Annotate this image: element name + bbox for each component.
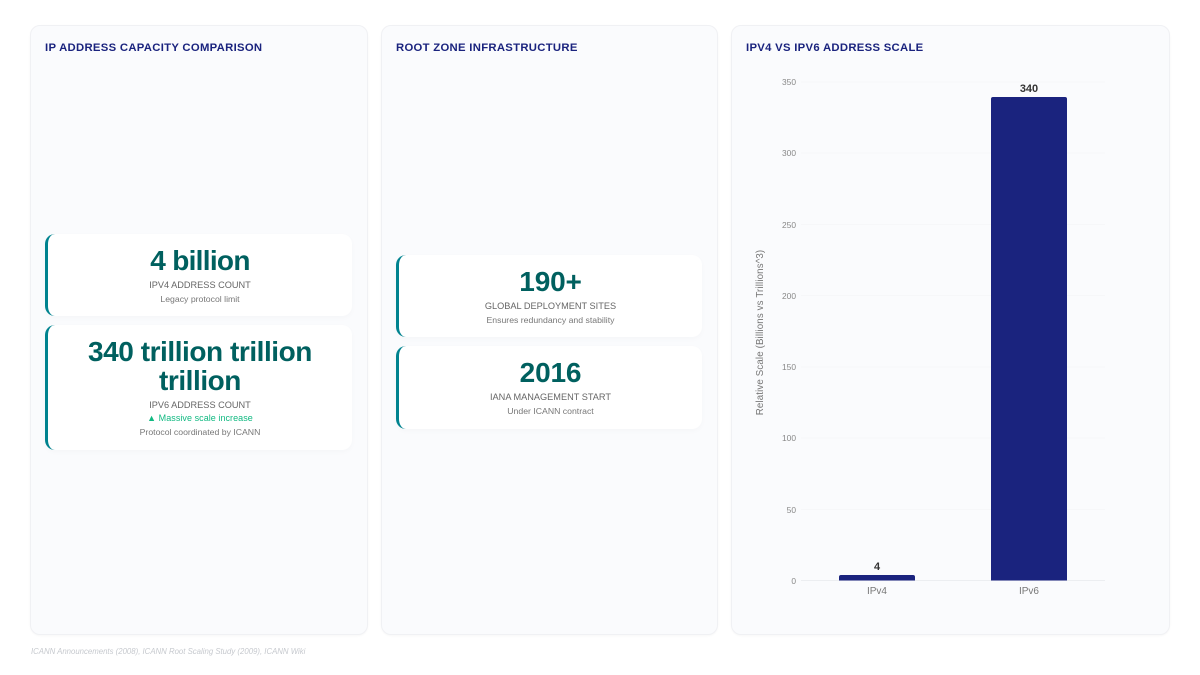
card: IPv4 address count: 4 billion <box>150 245 250 276</box>
y axis tick labels <box>782 77 796 586</box>
heading: root zone infrastructure: ROOT ZONE INFRASTRUCTURE <box>396 42 578 54</box>
card: IPv4 address count: Legacy protocol limit <box>160 294 240 304</box>
bar: IPv4: IPv4 <box>867 586 887 597</box>
bar chart: relative address scale <box>755 77 1105 597</box>
y axis title: Relative Scale (Billions vs Trillions^3) <box>755 250 766 415</box>
panel: IP address capacity comparison <box>30 25 368 635</box>
panel: IPv4 vs IPv6 address scale <box>731 25 1170 635</box>
y axis tick labels: 300 <box>782 148 796 158</box>
card: global deployment sites: GLOBAL DEPLOYMENT SITES <box>485 301 616 311</box>
card: IANA management start <box>396 346 702 429</box>
source note: ICANN Announcements (2008), ICANN Root Scaling Study (2009), ICANN Wiki <box>31 647 305 656</box>
card: global deployment sites <box>396 255 702 337</box>
y axis tick labels: 100 <box>782 433 796 443</box>
card: IPv6 address count: Protocol coordinated by ICANN <box>140 427 260 437</box>
y axis tick labels: 0 <box>791 576 796 586</box>
card: IPv6 address count <box>45 325 352 450</box>
y axis tick labels: 200 <box>782 291 796 301</box>
card: IANA management start: IANA MANAGEMENT START <box>490 392 611 402</box>
card: global deployment sites: Ensures redundancy and stability <box>486 315 614 325</box>
y axis tick labels: 150 <box>782 362 796 372</box>
card: IPv6 address count: trillion <box>159 365 241 396</box>
bar: IPv4: 4 <box>874 561 881 573</box>
heading: IPv4 vs IPv6 address scale: IPV4 VS IPV6 ADDRESS SCALE <box>746 42 924 54</box>
bar: IPv6: 340 <box>1020 83 1038 95</box>
y axis tick labels: 250 <box>782 220 796 230</box>
card: IANA management start: Under ICANN contract <box>507 406 594 416</box>
heading: IP address capacity comparison: IP ADDRESS CAPACITY COMPARISON <box>45 42 262 54</box>
card: IPv6 address count: IPV6 ADDRESS COUNT <box>149 400 251 410</box>
card: IANA management start: 2016 <box>520 357 581 388</box>
card: IPv6 address count: ▲ Massive scale increase <box>147 413 253 423</box>
y axis tick labels: 350 <box>782 77 796 87</box>
card: IPv4 address count <box>45 234 352 316</box>
card: IPv4 address count: IPV4 ADDRESS COUNT <box>149 280 251 290</box>
panel: root zone infrastructure <box>381 25 718 635</box>
bar: IPv6: IPv6 <box>1019 586 1039 597</box>
y axis tick labels: 50 <box>787 505 796 515</box>
bar: IPv6 <box>991 83 1067 597</box>
card: global deployment sites: 190+ <box>519 266 582 297</box>
bar: IPv4 <box>839 561 915 597</box>
card: IPv6 address count: 340 trillion trillion <box>88 336 312 367</box>
